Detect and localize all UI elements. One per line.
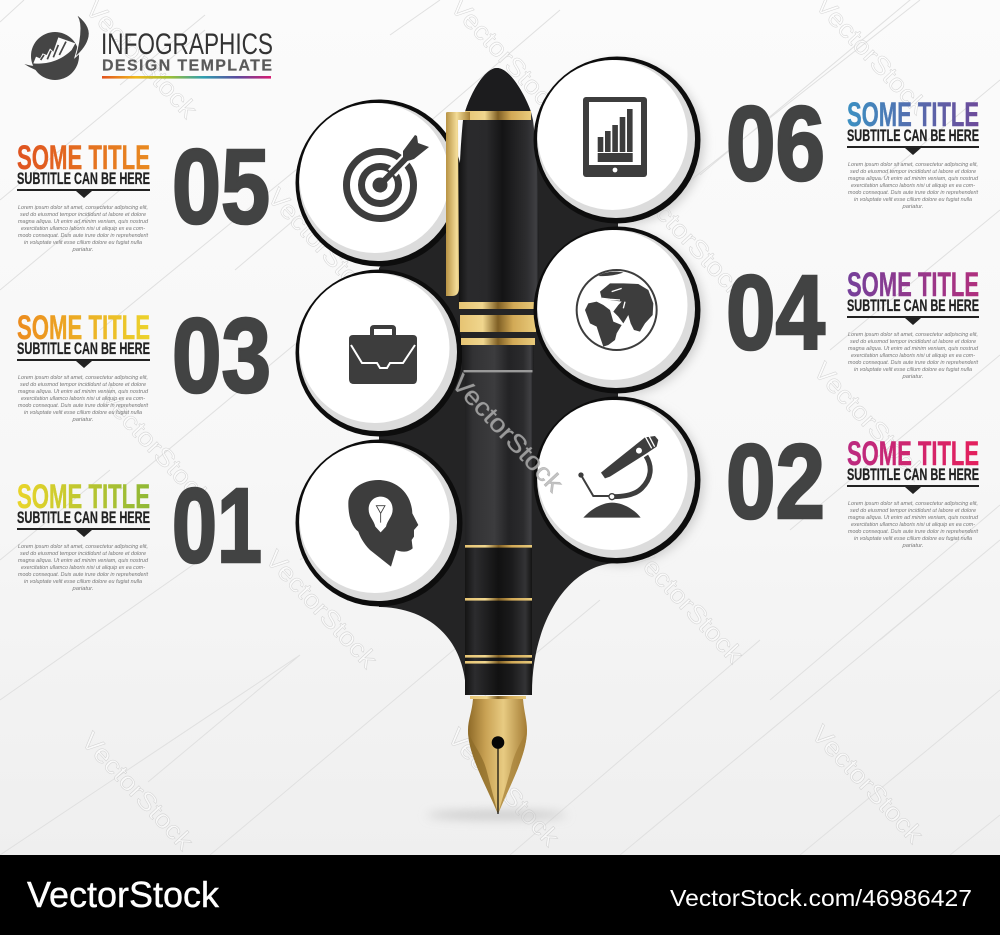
text block 05: sed do eiusmod tempor incididunt ut labore et dolore [20,212,146,218]
text block 02: exercitation ullamco laboris nisi ut aliquip ex ea com- [851,522,975,528]
text block 02 [847,435,979,549]
footer bar [0,855,1000,935]
text block 05: exercitation ullamco laboris nisi ut aliquip ex ea com- [21,226,145,232]
text block 02: in voluptate velit esse cillum dolore eu fugiat nulla [854,536,972,542]
text block 06: modo consequat. Duis aute irure dolor in reprehenderit [848,190,978,196]
logo [24,13,89,80]
text block 06: Lorem ipsum dolor sit amet, consectetur adipiscing elit, [848,162,978,168]
watermarks: VectorStock [628,175,751,304]
icon: tablet chart [583,97,647,177]
number 02: 02 [726,423,825,541]
text block 04: Lorem ipsum dolor sit amet, consectetur adipiscing elit, [848,332,978,338]
header title: DESIGN TEMPLATE [102,58,272,74]
watermarks: VectorStock [76,727,199,856]
pen clip [446,112,470,296]
circle 02 [534,396,700,564]
text block 05: SOME TITLE [17,139,150,177]
text block 06: exercitation ullamco laboris nisi ut aliquip ex ea com- [851,183,975,189]
pen nib [468,696,527,814]
text block 03: SUBTITLE CAN BE HERE [17,340,150,358]
pen barrel [462,345,534,695]
text block 04: in voluptate velit esse cillum dolore eu fugiat nulla [854,367,972,373]
text block 03: SOME TITLE [17,309,150,347]
ink blob [379,140,618,693]
text block 06: sed do eiusmod tempor incididunt ut labore et dolore [850,169,976,175]
text block 03: exercitation ullamco laboris nisi ut aliquip ex ea com- [21,396,145,402]
watermarks: VectorStock [260,545,383,674]
watermarks: VectorStock [262,183,385,312]
text block 02: modo consequat. Duis aute irure dolor in reprehenderit [848,529,978,535]
text block 01: SUBTITLE CAN BE HERE [17,509,150,527]
text block 03: modo consequat. Duis aute irure dolor in reprehenderit [18,403,148,409]
text block 03: sed do eiusmod tempor incididunt ut labore et dolore [20,382,146,388]
text block 01: pariatur. [71,586,94,592]
text block 05: SUBTITLE CAN BE HERE [17,170,150,188]
watermarks: VectorStock [626,540,749,669]
number 01: 01 [172,467,262,585]
fountain pen [458,68,539,814]
circle 04 [534,226,700,394]
text block 01: in voluptate velit esse cillum dolore eu fugiat nulla [24,579,142,585]
text block 04: magna aliqua. Ut enim ad minim veniam, quis nostrud [848,346,979,352]
text block 05: Lorem ipsum dolor sit amet, consectetur adipiscing elit, [18,205,148,211]
circle 05 [296,100,462,266]
watermarks: VectorStock [94,383,217,512]
footer brand: VectorStock [27,874,220,915]
text block 02: pariatur. [901,543,924,549]
text block 01: exercitation ullamco laboris nisi ut aliquip ex ea com- [21,565,145,571]
watermarks: VectorStock [806,720,929,849]
text block 05 [17,139,150,253]
circle 06 [534,56,700,224]
circle 01 [296,440,462,606]
text block 02: sed do eiusmod tempor incididunt ut labore et dolore [850,508,976,514]
number 03: 03 [172,297,271,415]
text block 02: Lorem ipsum dolor sit amet, consectetur adipiscing elit, [848,501,978,507]
text block 04: exercitation ullamco laboris nisi ut aliquip ex ea com- [851,353,975,359]
text block 01: SOME TITLE [17,478,150,516]
text block 05: magna aliqua. Ut enim ad minim veniam, quis nostrud [18,219,149,225]
text block 05: in voluptate velit esse cillum dolore eu fugiat nulla [24,240,142,246]
header title: INFOGRAPHICS [101,28,273,61]
watermark over pen: VectorStock [446,369,569,498]
text block 06 [847,96,979,210]
text block 04: pariatur. [901,374,924,380]
header title [101,28,273,79]
text block 06: magna aliqua. Ut enim ad minim veniam, quis nostrud [848,176,979,182]
number 05: 05 [172,128,270,246]
icon: head with bulb [348,480,418,567]
text block 04: modo consequat. Duis aute irure dolor in reprehenderit [848,360,978,366]
pen cap [458,68,539,302]
icon: target [346,135,429,218]
icon: microscope [578,435,658,518]
text block 03: pariatur. [71,417,94,423]
text block 01: modo consequat. Duis aute irure dolor in reprehenderit [18,572,148,578]
circle 03 [296,270,462,436]
text block 06: pariatur. [901,204,924,210]
text block 05: modo consequat. Duis aute irure dolor in reprehenderit [18,233,148,239]
text block 04 [847,266,979,380]
number 06: 06 [726,85,825,203]
text block 02: magna aliqua. Ut enim ad minim veniam, quis nostrud [848,515,979,521]
text block 01: sed do eiusmod tempor incididunt ut labore et dolore [20,551,146,557]
text block 04: sed do eiusmod tempor incididunt ut labore et dolore [850,339,976,345]
text block 01: Lorem ipsum dolor sit amet, consectetur adipiscing elit, [18,544,148,550]
text block 06: in voluptate velit esse cillum dolore eu fugiat nulla [854,197,972,203]
icon: globe [577,270,657,350]
footer url: VectorStock.com/46986427 [670,885,972,911]
text block 03: in voluptate velit esse cillum dolore eu fugiat nulla [24,410,142,416]
text block 01: magna aliqua. Ut enim ad minim veniam, quis nostrud [18,558,149,564]
pen rings [459,302,537,664]
text block 03: Lorem ipsum dolor sit amet, consectetur adipiscing elit, [18,375,148,381]
circle shadows [540,61,704,565]
icon: briefcase [349,325,417,384]
number 04: 04 [726,254,825,372]
watermarks: VectorStock [808,357,931,486]
watermarks [76,0,933,856]
text block 03 [17,309,150,423]
text block 03: magna aliqua. Ut enim ad minim veniam, quis nostrud [18,389,149,395]
text block 05: pariatur. [71,247,94,253]
nib shadow [427,811,567,819]
watermarks: VectorStock [442,723,565,852]
text block 01 [17,478,150,592]
